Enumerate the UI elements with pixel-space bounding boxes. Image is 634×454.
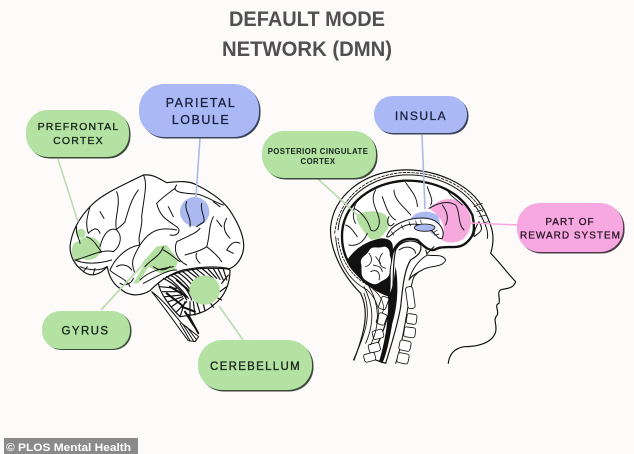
pill: insula (374, 96, 468, 134)
brainstem and spinal cord (371, 241, 421, 363)
title: NETWORK (DMN) (222, 38, 392, 61)
pill: posterior cingulate cortex (262, 131, 378, 180)
brain outline (70, 175, 244, 295)
photo credit: © PLOS Mental Health (6, 442, 131, 454)
pill: part of reward system: REWARD SYSTEM (520, 230, 621, 242)
connector: gyrus (101, 259, 148, 310)
pill: parietal lobule: PARIETAL (166, 96, 236, 110)
brain highlights green (72, 229, 178, 283)
corpus callosum (387, 218, 443, 239)
pill: insula: INSULA (395, 109, 447, 123)
pill: prefrontal cortex (26, 110, 130, 158)
brain folds (346, 183, 464, 245)
cerebellum highlight (189, 275, 220, 305)
title: DEFAULT MODE (229, 8, 385, 31)
pill: cerebellum (198, 340, 314, 392)
photo credit (4, 438, 138, 454)
pill: parietal lobule: LOBULE (172, 113, 230, 127)
pill: prefrontal cortex: CORTEX (53, 135, 104, 147)
pill: cerebellum: CEREBELLUM (210, 361, 301, 373)
parietal highlight (180, 197, 209, 226)
pill: gyrus: GYRUS (62, 326, 109, 338)
connector: prefrontal (58, 159, 78, 222)
face and skull outline (331, 170, 516, 363)
brain cavity (342, 181, 474, 293)
blue insula highlight (411, 212, 440, 235)
side view brain illustration (70, 175, 244, 342)
pill: posterior cingulate cortex: CORTEX (301, 157, 336, 166)
cerebellum and brainstem (152, 292, 199, 342)
sinus and nose cavity (409, 255, 446, 280)
pill: prefrontal cortex: PREFRONTAL (38, 121, 119, 133)
skull layers (338, 175, 488, 238)
connector: cerebellum (219, 306, 243, 340)
title (222, 8, 392, 61)
connector: reward system (470, 223, 518, 225)
connector: posterior cingulate (318, 179, 362, 219)
head cross-section illustration (331, 170, 516, 364)
pink reward highlight (429, 199, 471, 243)
pill: part of reward system (517, 203, 624, 254)
green cingulate highlight (357, 211, 389, 240)
vertebrae (363, 286, 417, 364)
pill: gyrus (42, 311, 132, 350)
pill: posterior cingulate cortex: POSTERIOR CINGULATE (268, 147, 368, 156)
brain folds (75, 175, 240, 287)
connector: parietal (196, 138, 200, 197)
cerebellum (347, 238, 393, 297)
connector: insula (422, 135, 425, 209)
pill: parietal lobule (139, 84, 260, 138)
pill: part of reward system: PART OF (545, 217, 595, 228)
